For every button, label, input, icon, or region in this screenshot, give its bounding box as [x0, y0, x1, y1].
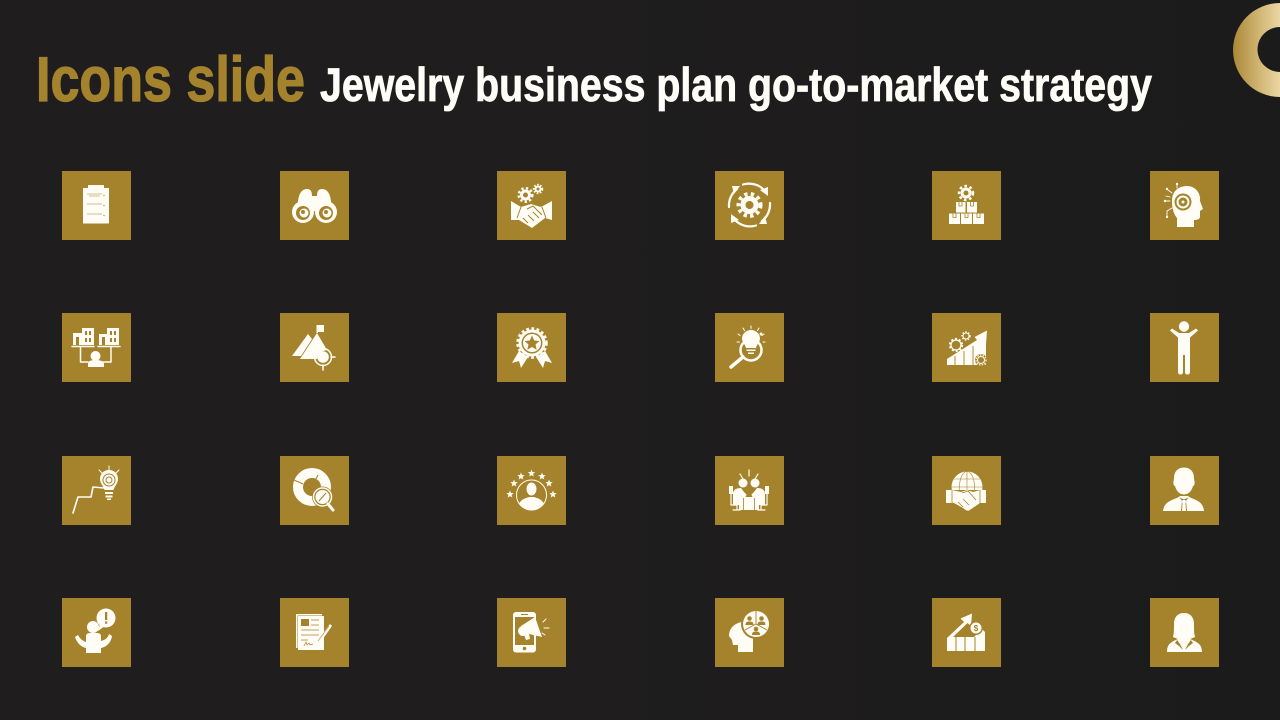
icon: businesswoman	[1150, 598, 1219, 667]
icon: clipboard checklist	[62, 171, 131, 240]
title	[36, 45, 1152, 115]
icon: head with gear	[1150, 171, 1219, 240]
icon: gear above boxes	[932, 171, 1001, 240]
icon: award ribbon with star	[497, 313, 566, 382]
icon: person with raised arms	[1150, 313, 1219, 382]
icon: person shrugging with speech bubble	[62, 598, 131, 667]
icon: head with audience pie	[715, 598, 784, 667]
icon: handshake with gears	[497, 171, 566, 240]
icon: signed document with pen	[280, 598, 349, 667]
icon: growth chart with gears	[932, 313, 1001, 382]
icon: person in circle with stars	[497, 456, 566, 525]
icon: donut chart with magnifier	[280, 456, 349, 525]
icon: meeting around table	[715, 456, 784, 525]
icon: rising arrow with coin and bars: $	[974, 624, 979, 633]
icon: rising arrow with coin and bars	[932, 598, 1001, 667]
icon: steps to lightbulb	[62, 456, 131, 525]
icon: buildings connected to person	[62, 313, 131, 382]
icon: gear with cycle arrows	[715, 171, 784, 240]
icon: mountain flag and target	[280, 313, 349, 382]
decorative gold ring	[1233, 3, 1280, 97]
icon: businessman	[1150, 456, 1219, 525]
icon: magnifier with lightbulb	[715, 313, 784, 382]
icon: globe with handshake	[932, 456, 1001, 525]
icon: binoculars	[280, 171, 349, 240]
icon: smartphone with megaphone	[497, 598, 566, 667]
title: Icons slide	[36, 45, 305, 115]
